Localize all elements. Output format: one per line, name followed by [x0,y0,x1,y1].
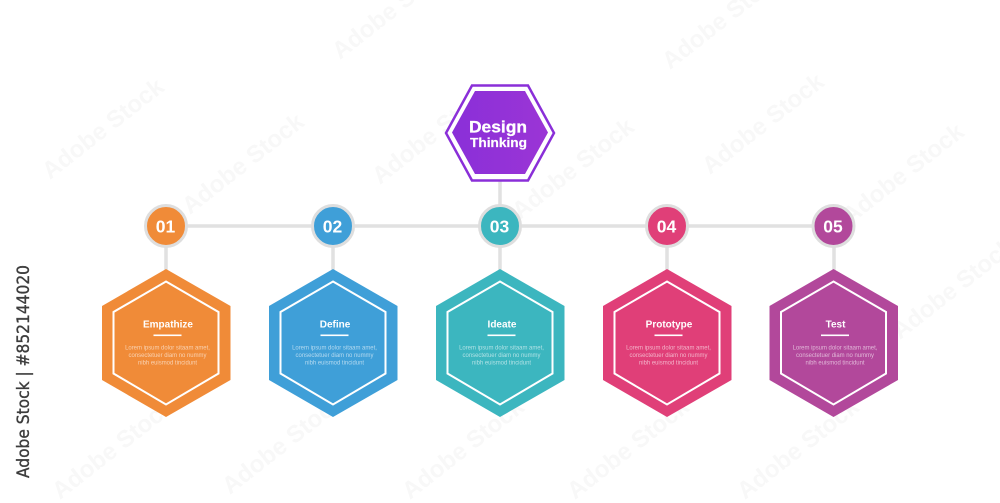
body text 05 [793,346,878,366]
number badge 04 [646,206,688,246]
number badge 01: 01 [156,216,175,236]
hexagon panel 04 [603,269,732,417]
body text 01: Lorem ipsum dolor sitaam amet, [125,346,210,352]
body text 01: consectetuer diam no nummy [129,353,206,359]
title: Define: Define [320,320,351,330]
side credit: Adobe Stock number: Adobe Stock | #852144020 [14,265,33,478]
body text 02 [292,346,377,366]
body text 03: nibh euismod tincidunt [472,360,531,366]
central hexagon: Design Thinking [446,86,554,180]
body text 04: nibh euismod tincidunt [639,360,698,366]
step 01: Empathize [102,206,230,417]
step 05: Test [770,206,898,417]
heading: Design: Design [469,118,527,136]
title: Prototype: Prototype [646,320,693,330]
watermark band: Adobe Stock [177,108,310,220]
body text 02: Lorem ipsum dolor sitaam amet, [292,346,377,352]
number badge 01 [146,206,186,246]
heading: Thinking: Thinking [470,135,527,150]
body text 03: consectetuer diam no nummy [463,353,540,359]
body text 05: Lorem ipsum dolor sitaam amet, [793,346,878,352]
watermark band: Adobe Stock [507,113,640,225]
title: Ideate: Ideate [488,320,517,330]
body text 04: consectetuer diam no nummy [630,353,707,359]
step 04: Prototype [603,206,732,417]
body text 04: Lorem ipsum dolor sitaam amet, [626,346,711,352]
watermark band: Adobe Stock [367,78,500,190]
body text 05: consectetuer diam no nummy [796,353,874,359]
number badge 05 [813,206,854,246]
hexagon panel 03 [436,269,564,417]
body text 05: nibh euismod tincidunt [805,360,865,366]
watermark band: Adobe Stock [562,393,695,503]
watermark band: Adobe Stock [732,393,865,503]
hexagon panel 05 [770,269,898,417]
number badge 03 [480,206,520,246]
watermark band: Adobe Stock [47,393,180,503]
number badge 02 [312,206,354,246]
step 02: Define [269,206,398,417]
hexagon panel 01 [102,269,230,417]
number badge 02: 02 [323,216,342,236]
title: Empathize: Empathize [143,320,193,330]
body text 01 [125,346,210,366]
body text 04 [626,346,711,366]
watermark band: Adobe Stock [397,393,530,503]
step 03: Ideate [436,206,564,417]
body text 03 [459,346,544,366]
watermark band: Adobe Stock [697,68,830,180]
watermark band: Adobe Stock [837,118,970,230]
title: Test: Test [826,320,846,330]
number badge 05: 05 [823,216,843,236]
body text 01: nibh euismod tincidunt [138,360,197,366]
hexagon panel 02 [269,269,398,417]
number badge 04: 04 [657,216,676,236]
watermark band: Adobe Stock [217,388,350,500]
body text 02: nibh euismod tincidunt [305,360,364,366]
watermark band: Adobe Stock [37,73,170,185]
body text 02: consectetuer diam no nummy [296,353,373,359]
body text 03: Lorem ipsum dolor sitaam amet, [459,346,544,352]
connector lines [166,178,834,272]
number badge 03: 03 [490,216,509,236]
